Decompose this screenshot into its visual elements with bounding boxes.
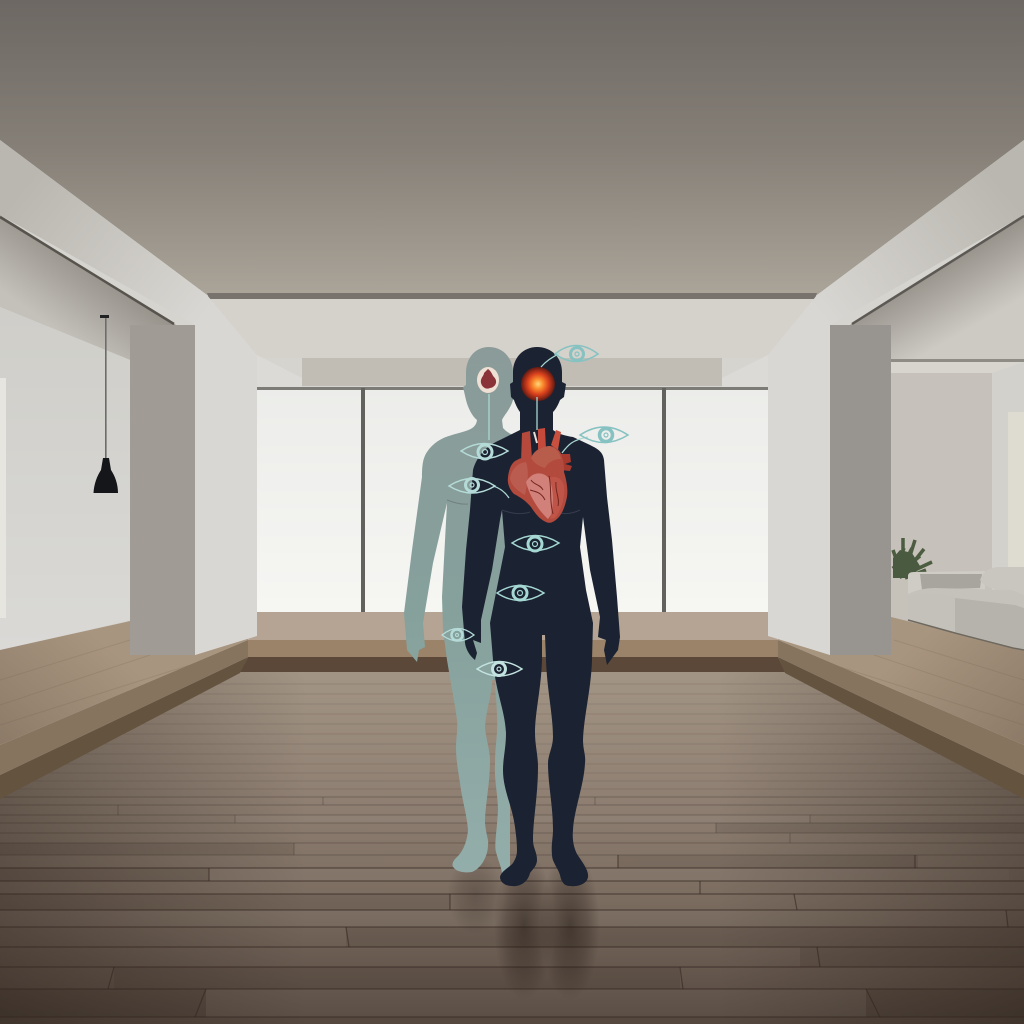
icon: eye on abdomen: [512, 536, 559, 551]
icon: eye on light figure hip: [442, 628, 474, 641]
icon: eye on lower abdomen: [497, 586, 544, 600]
right raised floor: [778, 617, 1024, 745]
wooden floor with planks: [0, 670, 1024, 1024]
dark figure: navy silhouette: [462, 347, 620, 886]
left room wall: [0, 307, 130, 650]
chest crease: [447, 500, 468, 504]
chest creases: [502, 510, 580, 514]
windows: [257, 387, 768, 612]
icon: eye on left chest: [449, 478, 495, 493]
right pillar and beam: [768, 140, 1024, 655]
pink ventricle: [526, 473, 554, 519]
connector lines between head and heart: [489, 353, 588, 498]
ceiling: [0, 0, 1024, 295]
left side room: [0, 215, 248, 799]
icon: eye above right of head: [555, 346, 598, 362]
upper arch: [531, 446, 561, 468]
near plank seams: [0, 855, 1024, 1017]
head wound marker: [477, 367, 499, 393]
coronary lines: [530, 476, 558, 514]
floor shadow of figures: [447, 850, 600, 1000]
icon: potted plant: [893, 538, 932, 617]
left room ceiling: [0, 215, 176, 360]
right room side wall: [992, 362, 1024, 640]
aorta and vessels: [521, 431, 532, 462]
sofa: [908, 567, 1024, 650]
light figure: teal-grey silhouette: [404, 347, 525, 873]
left atrium shading: [510, 462, 528, 495]
far plank seams: [66, 684, 957, 790]
right room ceiling: [850, 215, 1024, 362]
icon: eye right of shoulder: [580, 427, 628, 442]
icon: eye on thigh: [477, 662, 522, 676]
heart body: [508, 446, 567, 523]
anatomical heart: [508, 428, 572, 523]
pendant lamp: [94, 315, 118, 493]
right side room: [778, 215, 1024, 799]
right room back wall: [888, 373, 992, 628]
mid plank seams: [0, 797, 1024, 855]
left raised floor: [0, 621, 248, 745]
icon: eye on upper chest: [461, 444, 508, 459]
glowing brain orb: [521, 367, 555, 401]
central raised step: [240, 612, 785, 672]
left pillar and beam: [0, 140, 257, 655]
